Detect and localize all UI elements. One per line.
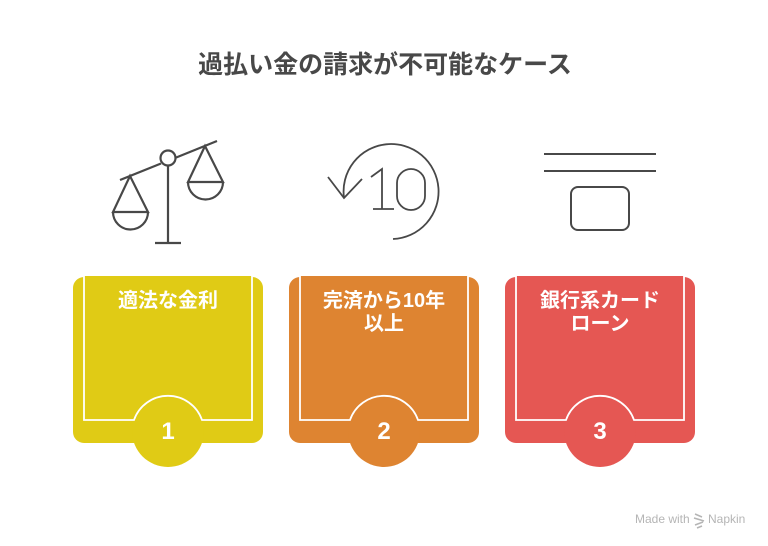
watermark: Made with [635, 512, 690, 526]
panel: card 3 [505, 276, 695, 467]
card 3 label: ローン [570, 313, 630, 335]
card 3 label: 銀行系カード [540, 289, 660, 312]
card 2 number: 2 [377, 418, 391, 445]
card 2 label: 以上 [364, 312, 404, 335]
icon: bank card [544, 154, 656, 230]
card 3 number: 3 [593, 418, 607, 445]
icon: ten-year countdown arrow [328, 144, 439, 239]
title: 過払い金の請求が不可能なケース [198, 50, 572, 79]
panel: card 1 [73, 276, 263, 467]
panel: card 2 [289, 276, 479, 467]
watermark: Napkin [708, 512, 745, 526]
watermark [635, 512, 745, 528]
icon: balance scale [113, 141, 223, 243]
card 1 number: 1 [161, 418, 175, 445]
icon: napkin logo [694, 514, 704, 528]
card 1 label: 適法な金利 [118, 289, 218, 312]
card 2 label: 完済から10年 [323, 289, 445, 312]
